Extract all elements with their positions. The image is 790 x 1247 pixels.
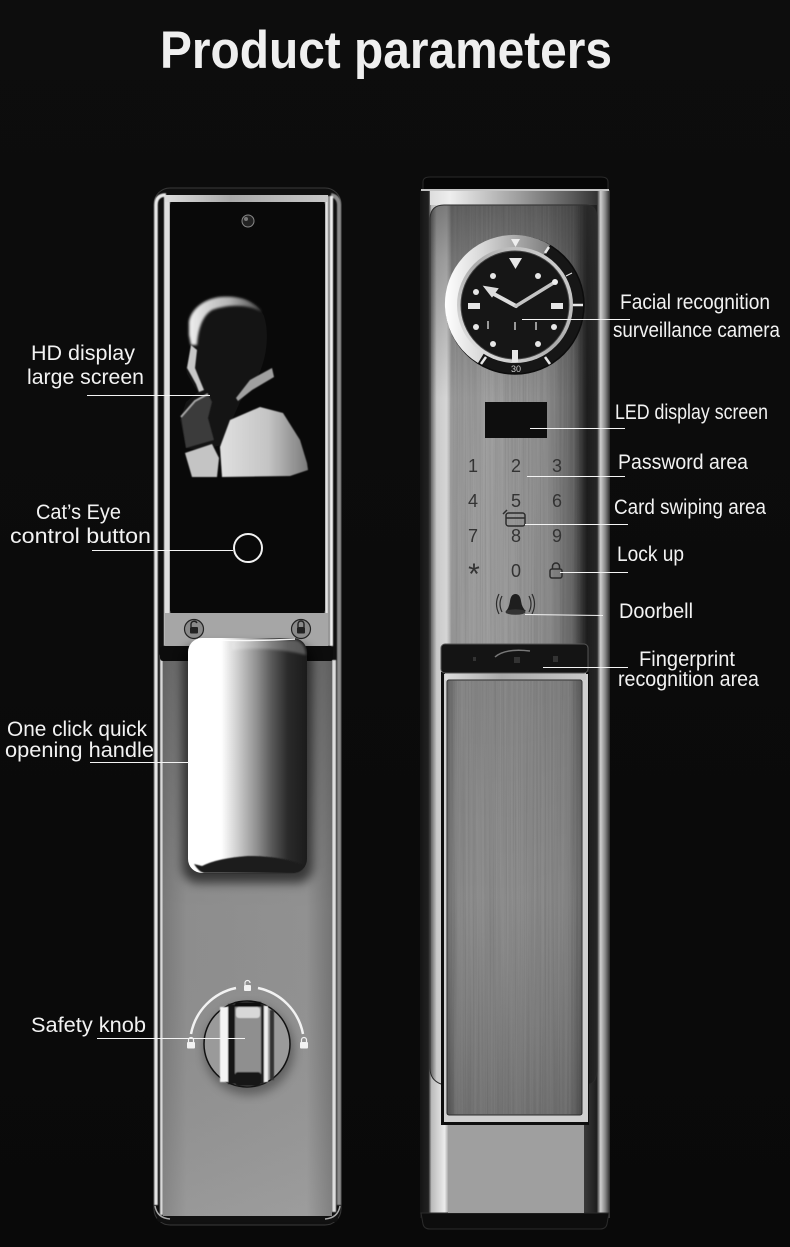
scale arcs — [191, 988, 303, 1034]
keypad digits: 9 — [552, 526, 562, 546]
icon: knob lock right — [300, 1038, 308, 1048]
label: HD display large screen: large screen — [27, 366, 144, 389]
bezel numerals: 30 — [511, 364, 521, 374]
keypad digits: 5 — [511, 491, 521, 511]
control button ring — [234, 534, 262, 562]
label: Fingerprint recognition area — [543, 648, 759, 691]
label: Cat's Eye control button: control button — [10, 525, 151, 548]
fingerprint reader — [441, 644, 588, 673]
label: Password area: Password area — [618, 451, 748, 474]
label: Lock up: Lock up — [617, 543, 684, 566]
keypad digits: 0 — [511, 561, 521, 581]
label: One click quick opening handle: opening handle — [5, 739, 154, 762]
dial markers — [468, 258, 563, 362]
lower faceplate — [155, 661, 340, 1222]
clock hands — [485, 279, 558, 306]
lower body — [448, 1085, 584, 1213]
icon: lock — [292, 620, 310, 638]
label: Lock up — [560, 543, 684, 572]
sub dials — [487, 321, 537, 330]
keypad digits: 6 — [552, 491, 562, 511]
icon: knob lock left — [187, 1038, 195, 1048]
handle — [441, 672, 589, 1125]
keypad faceplate — [430, 205, 597, 1084]
icon: card — [503, 510, 525, 526]
label: Card swiping area: Card swiping area — [614, 496, 766, 519]
keypad digits: 2 — [511, 456, 521, 476]
handle — [182, 638, 313, 883]
label: Safety knob: Safety knob — [31, 1014, 146, 1037]
icon: knob open — [244, 980, 251, 991]
icon: unlock — [184, 620, 204, 638]
panel: front lock with screen — [154, 188, 341, 1225]
icon: lock up — [550, 563, 562, 578]
camera lens — [242, 215, 254, 227]
clock — [445, 235, 584, 374]
label: One click quick opening handle: One click quick — [7, 718, 147, 741]
label: HD display large screen: HD display — [31, 342, 135, 365]
title: Product parameters — [160, 21, 612, 80]
icon: doorbell — [496, 594, 534, 615]
panel: back lock with clock and keypad — [420, 177, 610, 1229]
metal band under screen — [160, 613, 333, 661]
keypad digits: 4 — [468, 491, 478, 511]
safety knob — [187, 980, 308, 1095]
bezel marks — [481, 247, 583, 364]
label: Facial recognition surveillance camera — [522, 291, 780, 342]
keypad digits — [468, 456, 562, 591]
screen — [170, 202, 325, 613]
label: Cat's Eye control button — [10, 501, 233, 550]
man portrait — [180, 296, 308, 477]
bezel triangle — [511, 239, 520, 247]
keypad digits: 8 — [511, 526, 521, 546]
keypad digits: 3 — [552, 456, 562, 476]
keypad digits: * — [468, 558, 480, 591]
label: Facial recognition surveillance camera: Facial recognition — [620, 291, 770, 314]
label: HD display large screen — [27, 342, 210, 396]
label: Cat's Eye control button: Cat’s Eye — [36, 501, 121, 524]
label: Doorbell: Doorbell — [619, 600, 693, 623]
keypad digits: 1 — [468, 456, 478, 476]
label: Fingerprint recognition area: recognition area — [618, 668, 759, 691]
label: Fingerprint recognition area: Fingerprint — [639, 648, 735, 671]
keypad digits: 7 — [468, 526, 478, 546]
LED display — [485, 402, 547, 438]
label: One click quick opening handle — [5, 718, 189, 762]
